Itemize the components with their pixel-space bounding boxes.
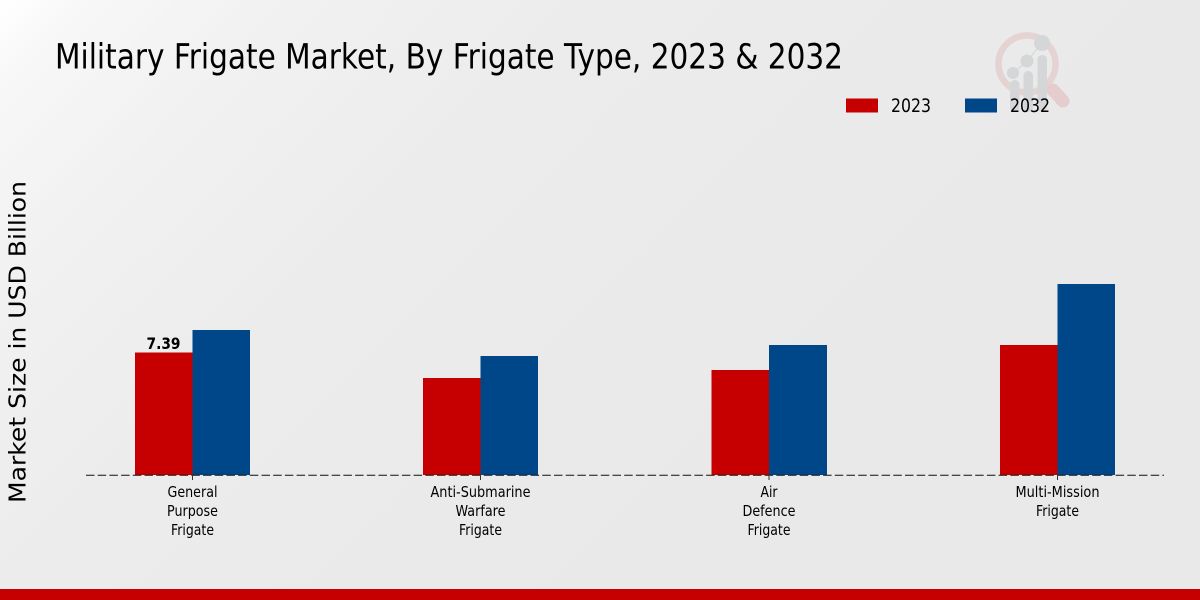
bars: Anti-Submarine Warfare Frigate [423, 356, 538, 475]
label: Multi-Mission Frigate [1016, 483, 1100, 520]
legend: 2023: 2023 [891, 96, 931, 117]
watermark logo [998, 35, 1063, 112]
bar chart [86, 284, 1164, 480]
bars: Air Defence Frigate [712, 345, 827, 475]
label: Anti-Submarine Warfare Frigate: Warfare [456, 502, 506, 520]
label: General Purpose Frigate: General [168, 483, 218, 501]
label: General Purpose Frigate: Purpose [167, 502, 218, 520]
axis ticks [192, 475, 1058, 480]
category labels [167, 483, 1100, 539]
label: Multi-Mission Frigate: Frigate [1036, 502, 1079, 520]
label: Air Defence Frigate: Frigate [748, 521, 790, 539]
legend [846, 96, 1050, 117]
bars: Multi-Mission Frigate [1000, 284, 1115, 475]
label: Air Defence Frigate [742, 483, 796, 539]
baseline [86, 474, 1164, 476]
label: Multi-Mission Frigate: Multi-Mission [1016, 483, 1100, 501]
legend: 2032 [965, 96, 1050, 117]
label: Air Defence Frigate: Defence [742, 502, 796, 520]
legend: 2023 [846, 96, 931, 117]
label: Anti-Submarine Warfare Frigate: Frigate [459, 521, 502, 539]
label: General Purpose Frigate: Frigate [171, 521, 214, 539]
label: Air Defence Frigate: Air [760, 483, 778, 501]
label: Anti-Submarine Warfare Frigate: Anti-Submarine [430, 483, 530, 501]
bottom bar [0, 589, 1200, 600]
value label: 7.39 [146, 334, 180, 353]
label: Anti-Submarine Warfare Frigate [430, 483, 530, 539]
title: Military Frigate Market, By Frigate Type, 2023 & 2032 [55, 38, 843, 78]
legend: 2032: 2032 [1010, 96, 1050, 117]
bars: General Purpose Frigate [135, 330, 250, 475]
label: General Purpose Frigate [167, 483, 218, 539]
y axis label: Market Size in USD Billion [6, 181, 32, 503]
